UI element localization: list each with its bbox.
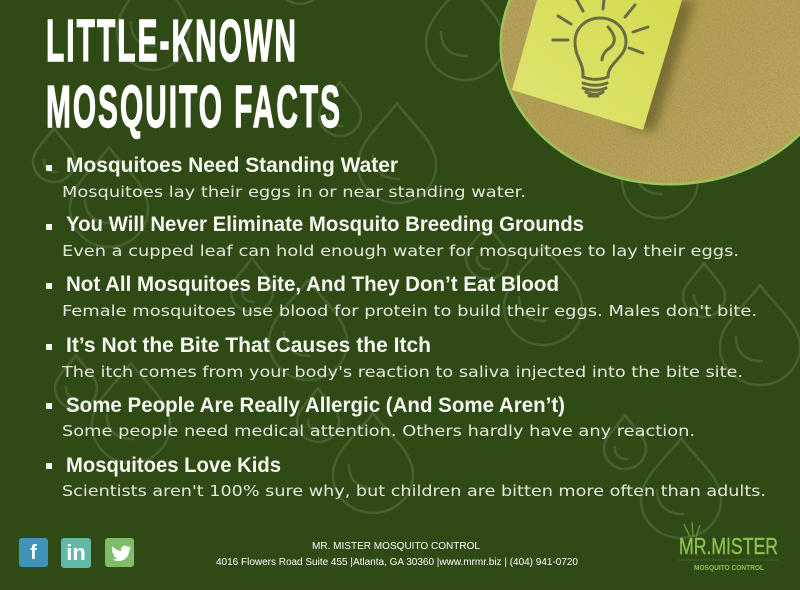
logo: Mr. Mister Mosquito Control: MOSQUITO CONTROL [694, 565, 765, 572]
fact 6: Mosquitoes Love Kids [66, 454, 281, 477]
fact 6: Scientists aren't 100% sure why, but children are bitten more often than adults. [62, 482, 766, 500]
logo: Mr. Mister Mosquito Control [678, 522, 779, 572]
sticky note [512, 0, 682, 130]
footer contact text: 4016 Flowers Road Suite 455 |Atlanta, GA 30360 |www.mrmr.biz | (404) 941-0720 [216, 556, 578, 568]
fact 3: Female mosquitoes use blood for protein to build their eggs. Males don't bite. [62, 302, 757, 320]
icon: twitter [105, 538, 134, 567]
fact 1 [46, 154, 526, 201]
fact 5: Some people need medical attention. Others hardly have any reaction. [62, 422, 695, 440]
fact 2: You Will Never Eliminate Mosquito Breeding Grounds [66, 213, 584, 236]
photo: sticky note with light bulb on corkboard [495, 0, 800, 190]
title: LITTLE-KNOWN [46, 8, 298, 74]
fact 3: Not All Mosquitoes Bite, And They Don’t Eat Blood [66, 273, 559, 296]
icon: facebook: f [30, 542, 37, 564]
icon: facebook [19, 538, 48, 567]
fact 1: Mosquitoes Need Standing Water [66, 154, 398, 177]
footer contact text [216, 540, 578, 568]
title: MOSQUITO FACTS [46, 74, 342, 140]
fact 1: Mosquitoes lay their eggs in or near standing water. [62, 183, 526, 201]
fact 4: The itch comes from your body's reaction to saliva injected into the bite site. [61, 363, 743, 381]
fact 5 [46, 394, 695, 440]
title [46, 8, 342, 140]
fact 6 [46, 454, 766, 500]
fact 2: Even a cupped leaf can hold enough water for mosquitoes to lay their eggs. [62, 242, 739, 260]
fact 5: Some People Are Really Allergic (And Some Aren’t) [66, 394, 565, 417]
icon: linkedin [61, 538, 91, 568]
fact 4 [46, 334, 743, 381]
fact 4: It’s Not the Bite That Causes the Itch [66, 334, 431, 357]
footer contact text: MR. MISTER MOSQUITO CONTROL [312, 540, 480, 552]
fact 3 [46, 273, 757, 320]
fact 2 [46, 213, 739, 260]
icon: linkedin: in [66, 540, 86, 565]
icon: light bulb [553, 0, 648, 96]
